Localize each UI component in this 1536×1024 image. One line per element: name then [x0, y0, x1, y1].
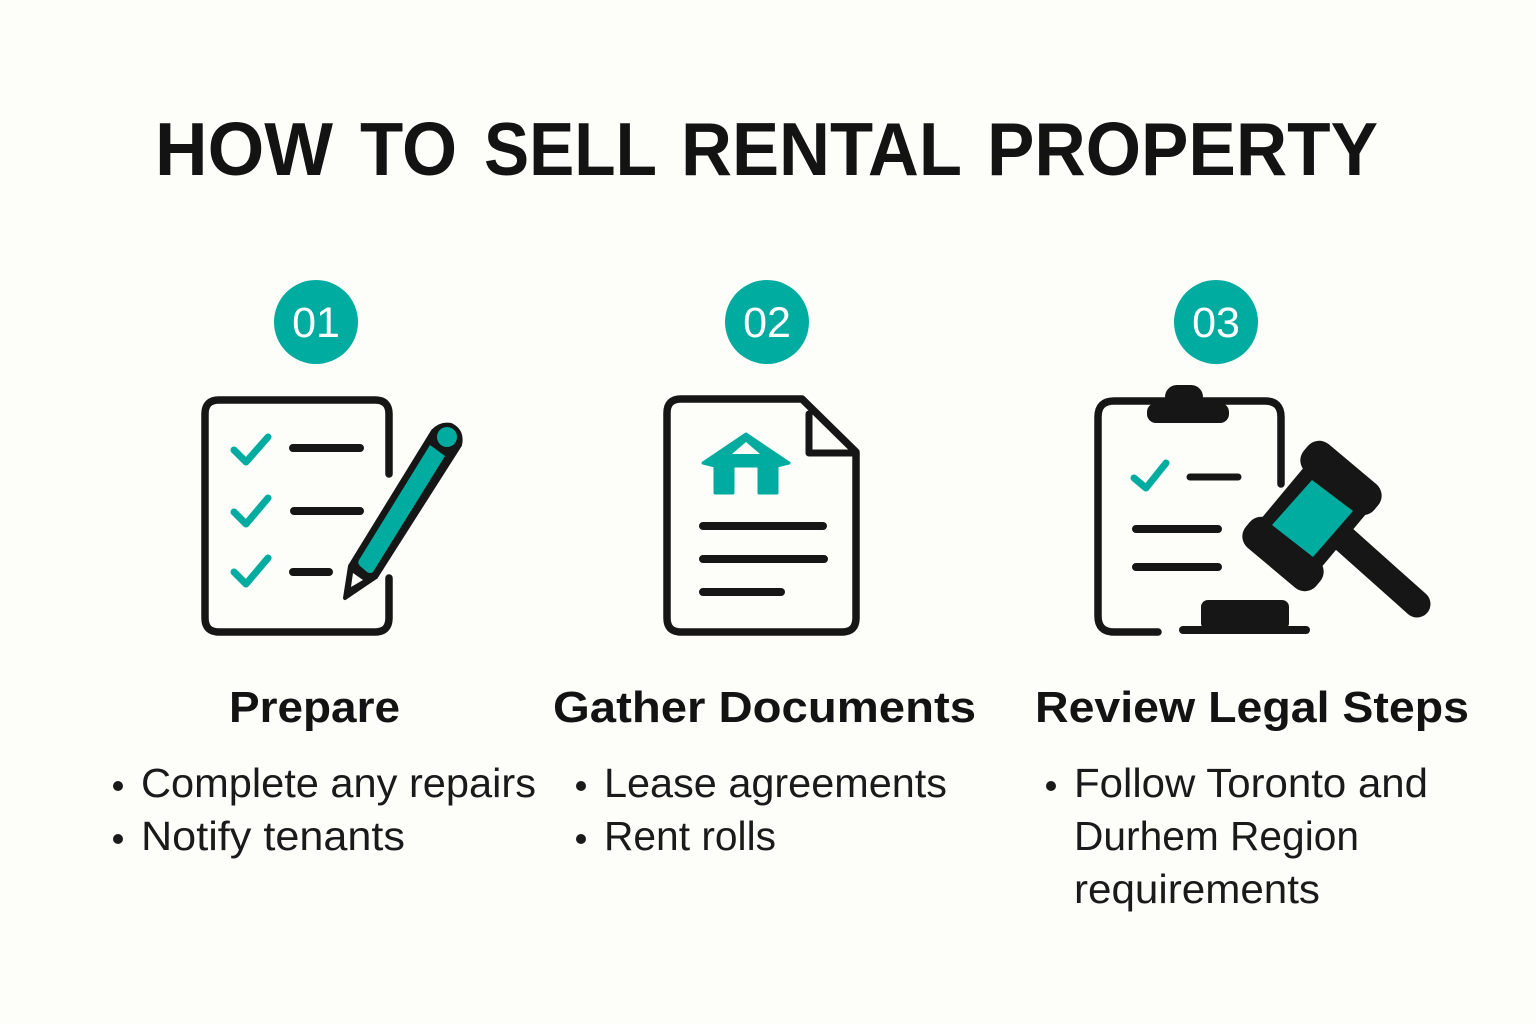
icon: clipboard with gavel: [1098, 385, 1417, 632]
list: document items: [576, 760, 947, 859]
title: PROPERTY: [987, 107, 1378, 191]
list: legal requirement: requirements: [1074, 866, 1320, 912]
list: prepare items: Notify tenants: [141, 813, 405, 859]
title: TO: [360, 107, 457, 191]
step number badge 03: [1174, 280, 1258, 364]
list: document items: Rent rolls: [604, 813, 776, 859]
title: SELL: [484, 107, 657, 191]
step number badge 01: [274, 280, 358, 364]
list: prepare items: Complete any repairs: [141, 760, 536, 806]
panel: step 2 gather documents: [553, 280, 976, 859]
panel: step 1 prepare: [113, 280, 536, 859]
title: RENTAL: [681, 107, 962, 191]
step number badge 03: 03: [1192, 299, 1240, 347]
heading: prepare: Prepare: [229, 683, 400, 732]
title: HOW: [155, 107, 333, 191]
list: document items: Lease agreements: [604, 760, 947, 806]
heading: review legal steps: Review Legal Steps: [1035, 683, 1469, 732]
icon: checklist with pencil: [205, 400, 461, 632]
step number badge 02: 02: [743, 299, 791, 347]
step number badge 02: [725, 280, 809, 364]
list: legal requirement: [1046, 760, 1428, 912]
list: prepare items: [113, 760, 536, 859]
title: [155, 107, 1378, 191]
list: legal requirement: Durhem Region: [1074, 813, 1359, 859]
icon: document with house: [667, 399, 856, 632]
heading: gather documents: Gather Documents: [553, 683, 976, 732]
list: legal requirement: Follow Toronto and: [1074, 760, 1428, 806]
panel: step 3 review legal steps: [1035, 280, 1469, 912]
step number badge 01: 01: [292, 299, 340, 347]
